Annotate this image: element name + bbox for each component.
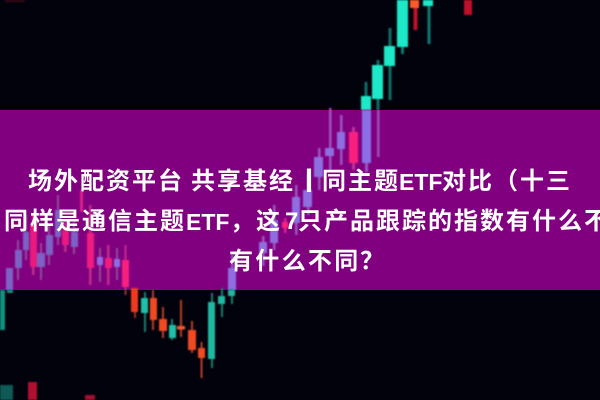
headline line 1: 场外配资平台 xyxy=(28,168,184,195)
headline line 2: 7 xyxy=(285,208,300,235)
headline line 2: ，这 xyxy=(230,208,282,235)
purple band xyxy=(0,110,600,290)
headline line 1: 共享基经 xyxy=(191,168,295,195)
headline line 1: 同主题 xyxy=(322,168,400,195)
headline line 3: ？ xyxy=(360,248,386,275)
headline line 2 xyxy=(4,208,600,235)
headline line 1: 对比（十三 xyxy=(442,168,572,195)
headline line 1: 丨 xyxy=(297,168,323,195)
headline line 3: 有什么不同 xyxy=(229,248,360,275)
headline line 2: 同样是通信主题 xyxy=(4,208,186,235)
candles above band xyxy=(5,0,472,110)
headline line 1: ETF xyxy=(399,169,442,195)
candles seen through band xyxy=(6,108,380,290)
headline line 1 xyxy=(28,168,572,195)
headline line 2: ETF xyxy=(186,209,229,235)
candles below band xyxy=(0,288,235,400)
